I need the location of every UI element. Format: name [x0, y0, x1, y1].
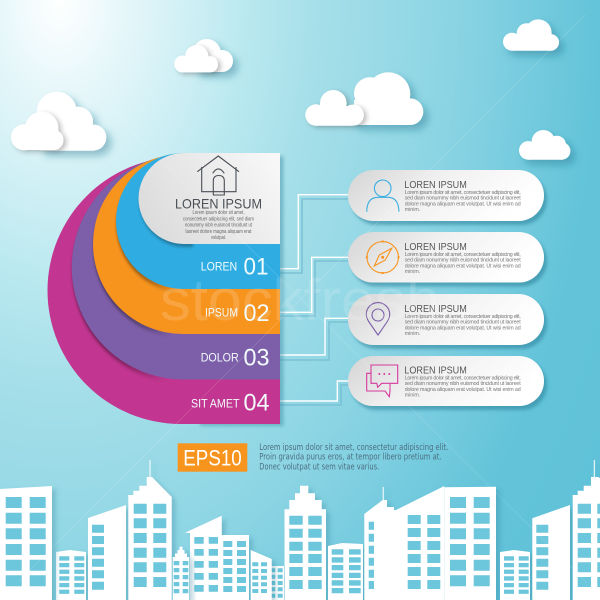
card 4 text: dolore magna aliquam erat volutpat. Ut wisi enim ad: [405, 387, 521, 393]
building: low triangular: [251, 550, 272, 600]
cloud: top centre: [174, 39, 233, 72]
icon: compass: [366, 240, 400, 274]
card 4: [348, 356, 544, 406]
building: stepped centre tower: [284, 486, 326, 600]
card 2: [348, 232, 544, 282]
panel body text: laoreet dolore magna aliquam erat: [186, 229, 252, 235]
card 1: [348, 170, 544, 221]
panel body text: volutpat.: [211, 235, 226, 241]
band 01 blue: [116, 153, 280, 289]
icon: map pin: [366, 303, 390, 335]
panel heading: LOREN IPSUM: [175, 196, 262, 212]
card 1 text: sed diam nonummy nibh euismod tincidunt ut laoreet: [405, 196, 521, 202]
card 4 text: sed diam nonummy nibh euismod tincidunt ut laoreet: [405, 381, 521, 387]
card 1 text: LOREN IPSUM: [404, 180, 467, 191]
card 2 text: LOREN IPSUM: [404, 242, 467, 253]
shadow on purple: [92, 228, 166, 335]
card 4 text: [404, 366, 521, 398]
footnote text: Donec volutpat ut sem vitae varius.: [259, 462, 379, 472]
label 04: SIT AMET: [191, 398, 240, 410]
top white panel: [139, 153, 280, 244]
building: small left: [56, 550, 86, 600]
label 03: 03: [244, 344, 270, 372]
building: small right: [500, 550, 530, 600]
footnote text: Proin gravida purus eros, at tempor libero pretium at.: [259, 453, 442, 463]
shadow on blue: [138, 192, 195, 249]
footnote text: [259, 443, 448, 472]
card 2 text: dolore magna aliquam erat volutpat. Ut wisi enim ad: [405, 263, 521, 269]
label 02: [205, 300, 270, 327]
card 2 text: minim.: [405, 269, 420, 275]
card 3 text: Lorem ipsum dolor sit amet, consectetuer adipiscing elit,: [405, 314, 521, 320]
card 4 text: minim.: [405, 392, 420, 398]
card 2 text: [404, 242, 521, 275]
band labels: [191, 254, 270, 417]
cloud: right small: [519, 130, 570, 160]
panel body text: [183, 210, 254, 241]
label 03: DOLOR: [201, 353, 239, 365]
building: slanted left: [88, 505, 126, 600]
city skyline: [0, 460, 600, 600]
icon: house: [197, 156, 239, 195]
cloud: centre right large: [305, 72, 423, 126]
label 04: 04: [244, 390, 270, 417]
building: large right: [444, 487, 496, 600]
card 2 text: Lorem ipsum dolor sit amet, consectetuer adipiscing elit,: [405, 252, 521, 258]
card 1 text: [404, 180, 521, 213]
building: stepped roof with spire left: [128, 460, 172, 600]
label 01: 01: [244, 254, 268, 281]
card 3 text: LOREN IPSUM: [404, 304, 467, 315]
panel shadow: [200, 156, 284, 426]
band 04 magenta: [48, 157, 280, 424]
card 3 text: sed diam nonummy nibh euismod tincidunt ut laoreet: [405, 320, 521, 326]
label 04: [191, 390, 270, 417]
card 3 text: dolore magna aliquam erat volutpat. Ut wisi enim ad: [405, 325, 521, 331]
panel body text: Lorem ipsum dolor sit amet,: [192, 210, 245, 216]
band 03 purple: [72, 155, 280, 380]
cloud: left large: [11, 92, 106, 151]
card 2 text: sed diam nonummy nibh euismod tincidunt ut laoreet: [405, 258, 521, 264]
label 02: IPSUM: [205, 308, 238, 320]
band 02 orange: [93, 154, 280, 334]
watermark: stockfresh: [160, 268, 440, 333]
EPS10 badge: EPS10: [183, 445, 242, 470]
building: slanted right: [532, 505, 570, 600]
shadow on magenta: [70, 242, 160, 380]
card 1 text: dolore magna aliquam erat volutpat. Ut wisi enim ad: [405, 201, 521, 207]
building: stepped right tower with spire: [573, 460, 600, 600]
card 1 text: Lorem ipsum dolor sit amet, consectetuer adipiscing elit,: [405, 190, 521, 196]
panel body text: nonummy nibh euismod tincidunt ut: [185, 223, 252, 229]
building: low right-block: [269, 566, 284, 600]
panel: stacked semicircle bands: [48, 153, 280, 424]
card 3: [348, 294, 544, 345]
cloud: top right: [503, 19, 559, 51]
card 3 text: minim.: [405, 331, 420, 337]
connector lines: [280, 195, 348, 405]
label 03: [201, 344, 270, 372]
building: small stepped: [173, 547, 189, 600]
label 02: 02: [244, 300, 270, 327]
building: low centre: [328, 543, 363, 600]
building: slanted complex: [364, 486, 444, 600]
building: far left: [0, 486, 52, 600]
footnote text: Lorem ipsum dolor sit amet, consectetur adipiscing elit.: [259, 443, 448, 453]
icon: chat bubbles: [367, 365, 398, 397]
label 01: [201, 254, 268, 281]
shadow on orange: [114, 204, 173, 292]
building: gabled twin block: [185, 516, 249, 600]
card 3 text: [404, 304, 521, 337]
card 4 text: Lorem ipsum dolor sit amet, consectetuer adipiscing elit,: [405, 376, 521, 382]
label 01: LOREN: [201, 262, 237, 274]
card 1 text: minim.: [405, 207, 420, 213]
panel body text: consectetuer adipiscing elit, sed diam: [183, 216, 254, 222]
card 4 text: LOREN IPSUM: [404, 366, 467, 376]
icon: person: [367, 180, 399, 212]
